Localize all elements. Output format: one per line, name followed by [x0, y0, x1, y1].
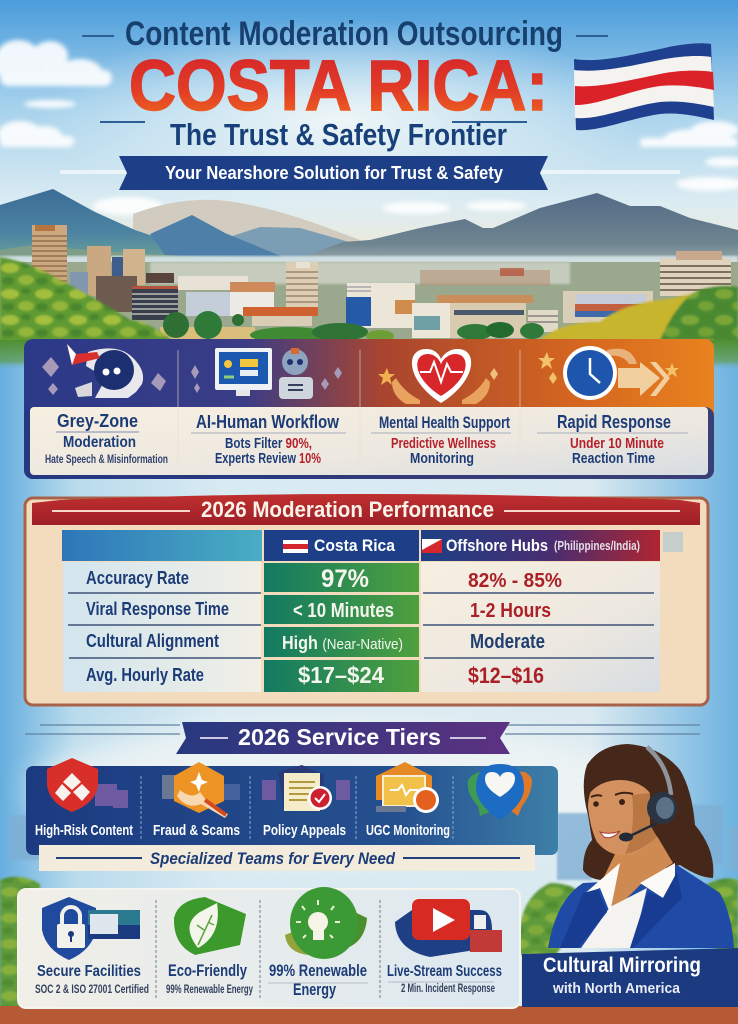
label: fraud and scams: Fraud & Scams [153, 822, 240, 839]
row: viral response time [86, 599, 551, 622]
text: live-stream success [387, 963, 502, 995]
card: rapid response: Reaction Time [572, 450, 655, 467]
face [588, 775, 657, 855]
panel: certifications [18, 887, 520, 1008]
row: viral response time: < 10 Minutes [293, 600, 394, 622]
card: AI-human workflow: Bots Filter 90%, [225, 435, 312, 452]
icon: high-risk shield [47, 758, 128, 812]
text: renewable energy: Energy [293, 980, 336, 999]
row: cultural alignment: High (Near-Native) [282, 633, 403, 653]
face shadow [625, 793, 657, 854]
sky background [0, 0, 738, 300]
collar [583, 863, 675, 913]
icon: UGC monitoring [376, 762, 439, 813]
table header: offshore hubs [422, 536, 640, 555]
shirt [581, 888, 647, 948]
card: grey-zone: Hate Speech & Misinformation [45, 452, 168, 466]
icon: rapid response clock [538, 346, 679, 400]
text: renewable energy: 99% Renewable [269, 961, 367, 980]
comparison table [62, 530, 683, 692]
strip: specialized teams [39, 845, 535, 871]
card: AI-human workflow [191, 412, 346, 467]
label: policy appeals: Policy Appeals [263, 822, 346, 839]
subtitle banner: Your Nearshore Solution for Trust & Safety [165, 163, 503, 183]
heading: 2026 service tiers [25, 722, 700, 754]
row: viral response time: Viral Response Time [86, 599, 229, 619]
callout: cultural mirroring: Cultural Mirroring [543, 954, 701, 977]
card: mental health support: Mental Health Support [379, 413, 510, 432]
row: average hourly rate [86, 662, 544, 688]
headset mic [619, 823, 657, 842]
text: secure facilities: Secure Facilities [37, 963, 141, 980]
label: UGC monitoring: UGC Monitoring [366, 822, 450, 839]
text: eco-friendly: 99% Renewable Energy [166, 984, 253, 996]
panel: 2026 moderation performance [25, 494, 708, 705]
card: mental health support [371, 413, 511, 467]
row: accuracy rate: 97% [321, 565, 369, 593]
smile [600, 831, 620, 838]
icon: AI workflow [191, 348, 342, 399]
headset band [647, 747, 671, 795]
flag [574, 43, 714, 130]
blazer [548, 865, 734, 948]
table header: Costa Rica: Costa Rica [314, 536, 395, 555]
hair [583, 744, 713, 880]
row: accuracy rate [86, 565, 562, 593]
headset ear cup [647, 792, 677, 824]
title: The Trust & Safety Frontier [170, 117, 507, 152]
card: AI-human workflow: AI-Human Workflow [196, 412, 340, 432]
row: accuracy rate: Accuracy Rate [86, 568, 189, 588]
trees [0, 257, 738, 372]
callout: cultural mirroring: with North America [552, 980, 681, 997]
text: live-stream success: Live-Stream Success [387, 963, 502, 980]
row: average hourly rate: Avg. Hourly Rate [86, 665, 204, 685]
card: rapid response: Under 10 Minute [570, 435, 664, 452]
heading ribbon: 2026 Moderation Performance [201, 497, 494, 522]
card: mental health support: Monitoring [410, 450, 474, 467]
lapels [560, 872, 682, 948]
text: live-stream success: 2 Min. Incident Response [401, 983, 495, 995]
clouds [0, 40, 738, 215]
row: average hourly rate: $12–$16 [468, 663, 544, 688]
panel: key capabilities [24, 339, 714, 479]
subtitle banner [60, 156, 680, 190]
card: grey-zone: Grey-Zone [57, 411, 138, 431]
icon: mental health heart [378, 349, 498, 404]
row: cultural alignment [86, 631, 545, 653]
city skyline [32, 225, 731, 338]
strip: specialized teams: Specialized Teams for Every Need [150, 849, 396, 868]
row: average hourly rate: $17–$24 [298, 662, 384, 688]
row: accuracy rate: 82% - 85% [468, 570, 562, 592]
text: renewable energy [268, 961, 368, 999]
label: high-risk content: High-Risk Content [35, 822, 133, 839]
text: secure facilities: SOC 2 & ISO 27001 Certified [35, 984, 149, 996]
heading: 2026 service tiers: 2026 Service Tiers [238, 724, 441, 750]
text: secure facilities [35, 963, 149, 996]
lower background [0, 340, 738, 1024]
eyebrows [591, 793, 633, 797]
icon: heart pin [468, 764, 532, 820]
woman with headset [548, 744, 734, 948]
fringe [588, 768, 652, 795]
row: cultural alignment: Moderate [470, 631, 545, 653]
icon: policy appeals [262, 765, 350, 811]
panel: service tiers [26, 758, 558, 855]
town ground [0, 262, 738, 342]
icon: fraud and scams [162, 762, 240, 818]
title: COSTA RICA: [129, 47, 548, 126]
text: eco-friendly [166, 961, 253, 996]
table header: offshore hubs: Offshore Hubs [446, 536, 548, 555]
card: rapid response [537, 412, 688, 467]
text: eco-friendly: Eco-Friendly [168, 961, 247, 980]
icon: grey-zone [42, 344, 166, 398]
card: mental health support: Predictive Wellness [391, 435, 496, 452]
callout: cultural mirroring [522, 948, 738, 1007]
neck [600, 836, 673, 912]
title [125, 15, 563, 152]
icon: light bulb [285, 887, 367, 959]
sub-title dashes [82, 36, 608, 122]
card: grey-zone: Moderation [63, 434, 136, 451]
eyes [593, 799, 625, 807]
row: cultural alignment: Cultural Alignment [86, 631, 219, 651]
mountains [0, 189, 738, 268]
card: AI-human workflow: Experts Review 10% [215, 450, 321, 467]
title: Content Moderation Outsourcing [125, 15, 563, 53]
table header: Costa Rica [283, 536, 395, 555]
icon: live-stream [395, 899, 502, 957]
icon: secure shield [42, 897, 140, 960]
row: viral response time: 1-2 Hours [470, 600, 551, 622]
table header: offshore hubs: (Philippines/India) [554, 538, 640, 553]
heading ribbon [32, 494, 700, 525]
card: grey-zone [45, 411, 168, 466]
icon: leaf [174, 897, 246, 955]
card: rapid response: Rapid Response [557, 412, 671, 432]
